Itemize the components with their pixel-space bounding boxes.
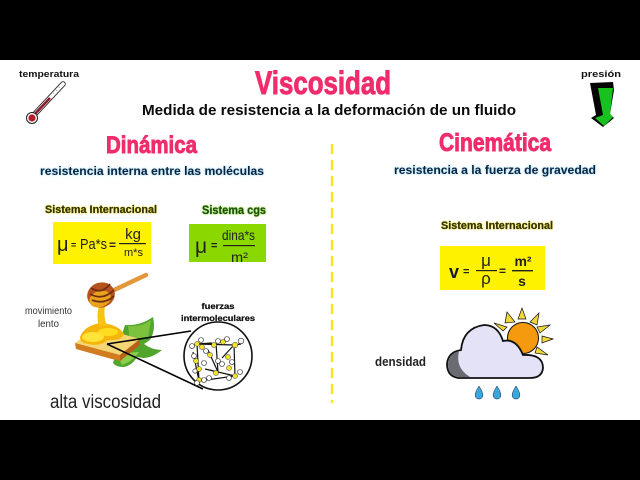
formula box: cgs: = [211, 240, 217, 252]
label: Sistema Internacional: Sistema Internacional [45, 204, 157, 216]
formula box: cgs: dina*s [222, 227, 255, 243]
formula box: kinematic viscosity [440, 246, 545, 290]
formula box: cgs [189, 224, 266, 265]
description: resistencia interna entre las moléculas [40, 166, 264, 178]
label: movimiento lento: movimiento [25, 306, 72, 317]
formula box: kinematic viscosity: v [449, 262, 459, 282]
icon: cloud with sun and rain [447, 308, 553, 399]
formula box: kinematic viscosity: ρ [481, 269, 491, 288]
formula box: kinematic viscosity: = [499, 264, 506, 278]
formula box: SI [53, 222, 151, 264]
label: Sistema Internacional: Sistema Internacional [441, 220, 553, 232]
title: Viscosidad [255, 65, 391, 101]
illustration: honey on toast [75, 275, 162, 367]
label: presión: presión [581, 69, 621, 80]
icon: pressure arrow [590, 82, 614, 127]
formula box: kinematic viscosity: s [518, 273, 526, 289]
label: movimiento lento [25, 306, 72, 330]
label: fuerzas intermoleculares: intermoleculares [181, 313, 255, 323]
label: movimiento lento: lento [38, 319, 59, 330]
label: fuerzas intermoleculares: fuerzas [202, 301, 235, 311]
icon: thermometer [26, 84, 63, 124]
formula box: cgs: m² [231, 249, 248, 265]
description: resistencia a la fuerza de gravedad [394, 165, 596, 177]
caption: alta viscosidad: alta viscosidad [50, 392, 161, 413]
panel: cinemática [375, 129, 596, 399]
heading: Dinámica: Dinámica [106, 132, 198, 159]
divider [331, 144, 333, 403]
formula box: SI: Pa*s [80, 236, 107, 253]
label: fuerzas intermoleculares [181, 301, 255, 323]
panel: dinámica [25, 132, 266, 413]
formula box: SI: m*s [124, 247, 143, 259]
formula box: kinematic viscosity: m² [514, 253, 532, 269]
label: temperatura: temperatura [19, 69, 80, 80]
formula box: kinematic viscosity: μ [481, 251, 491, 270]
label: Sistema cgs: Sistema cgs [202, 205, 266, 217]
formula box: SI: kg [125, 226, 141, 243]
heading: Cinemática: Cinemática [439, 129, 552, 157]
formula box: SI: = [71, 240, 76, 250]
subtitle: Medida de resistencia a la deformación de un fluido [142, 103, 516, 119]
formula box: SI: = [109, 238, 116, 252]
label: densidad: densidad [375, 355, 426, 369]
formula box: SI: μ [57, 234, 69, 256]
formula box: kinematic viscosity: = [463, 266, 469, 278]
callout lines [107, 331, 203, 389]
formula box: cgs: μ [195, 235, 207, 258]
illustration: molecular structure [184, 322, 252, 390]
